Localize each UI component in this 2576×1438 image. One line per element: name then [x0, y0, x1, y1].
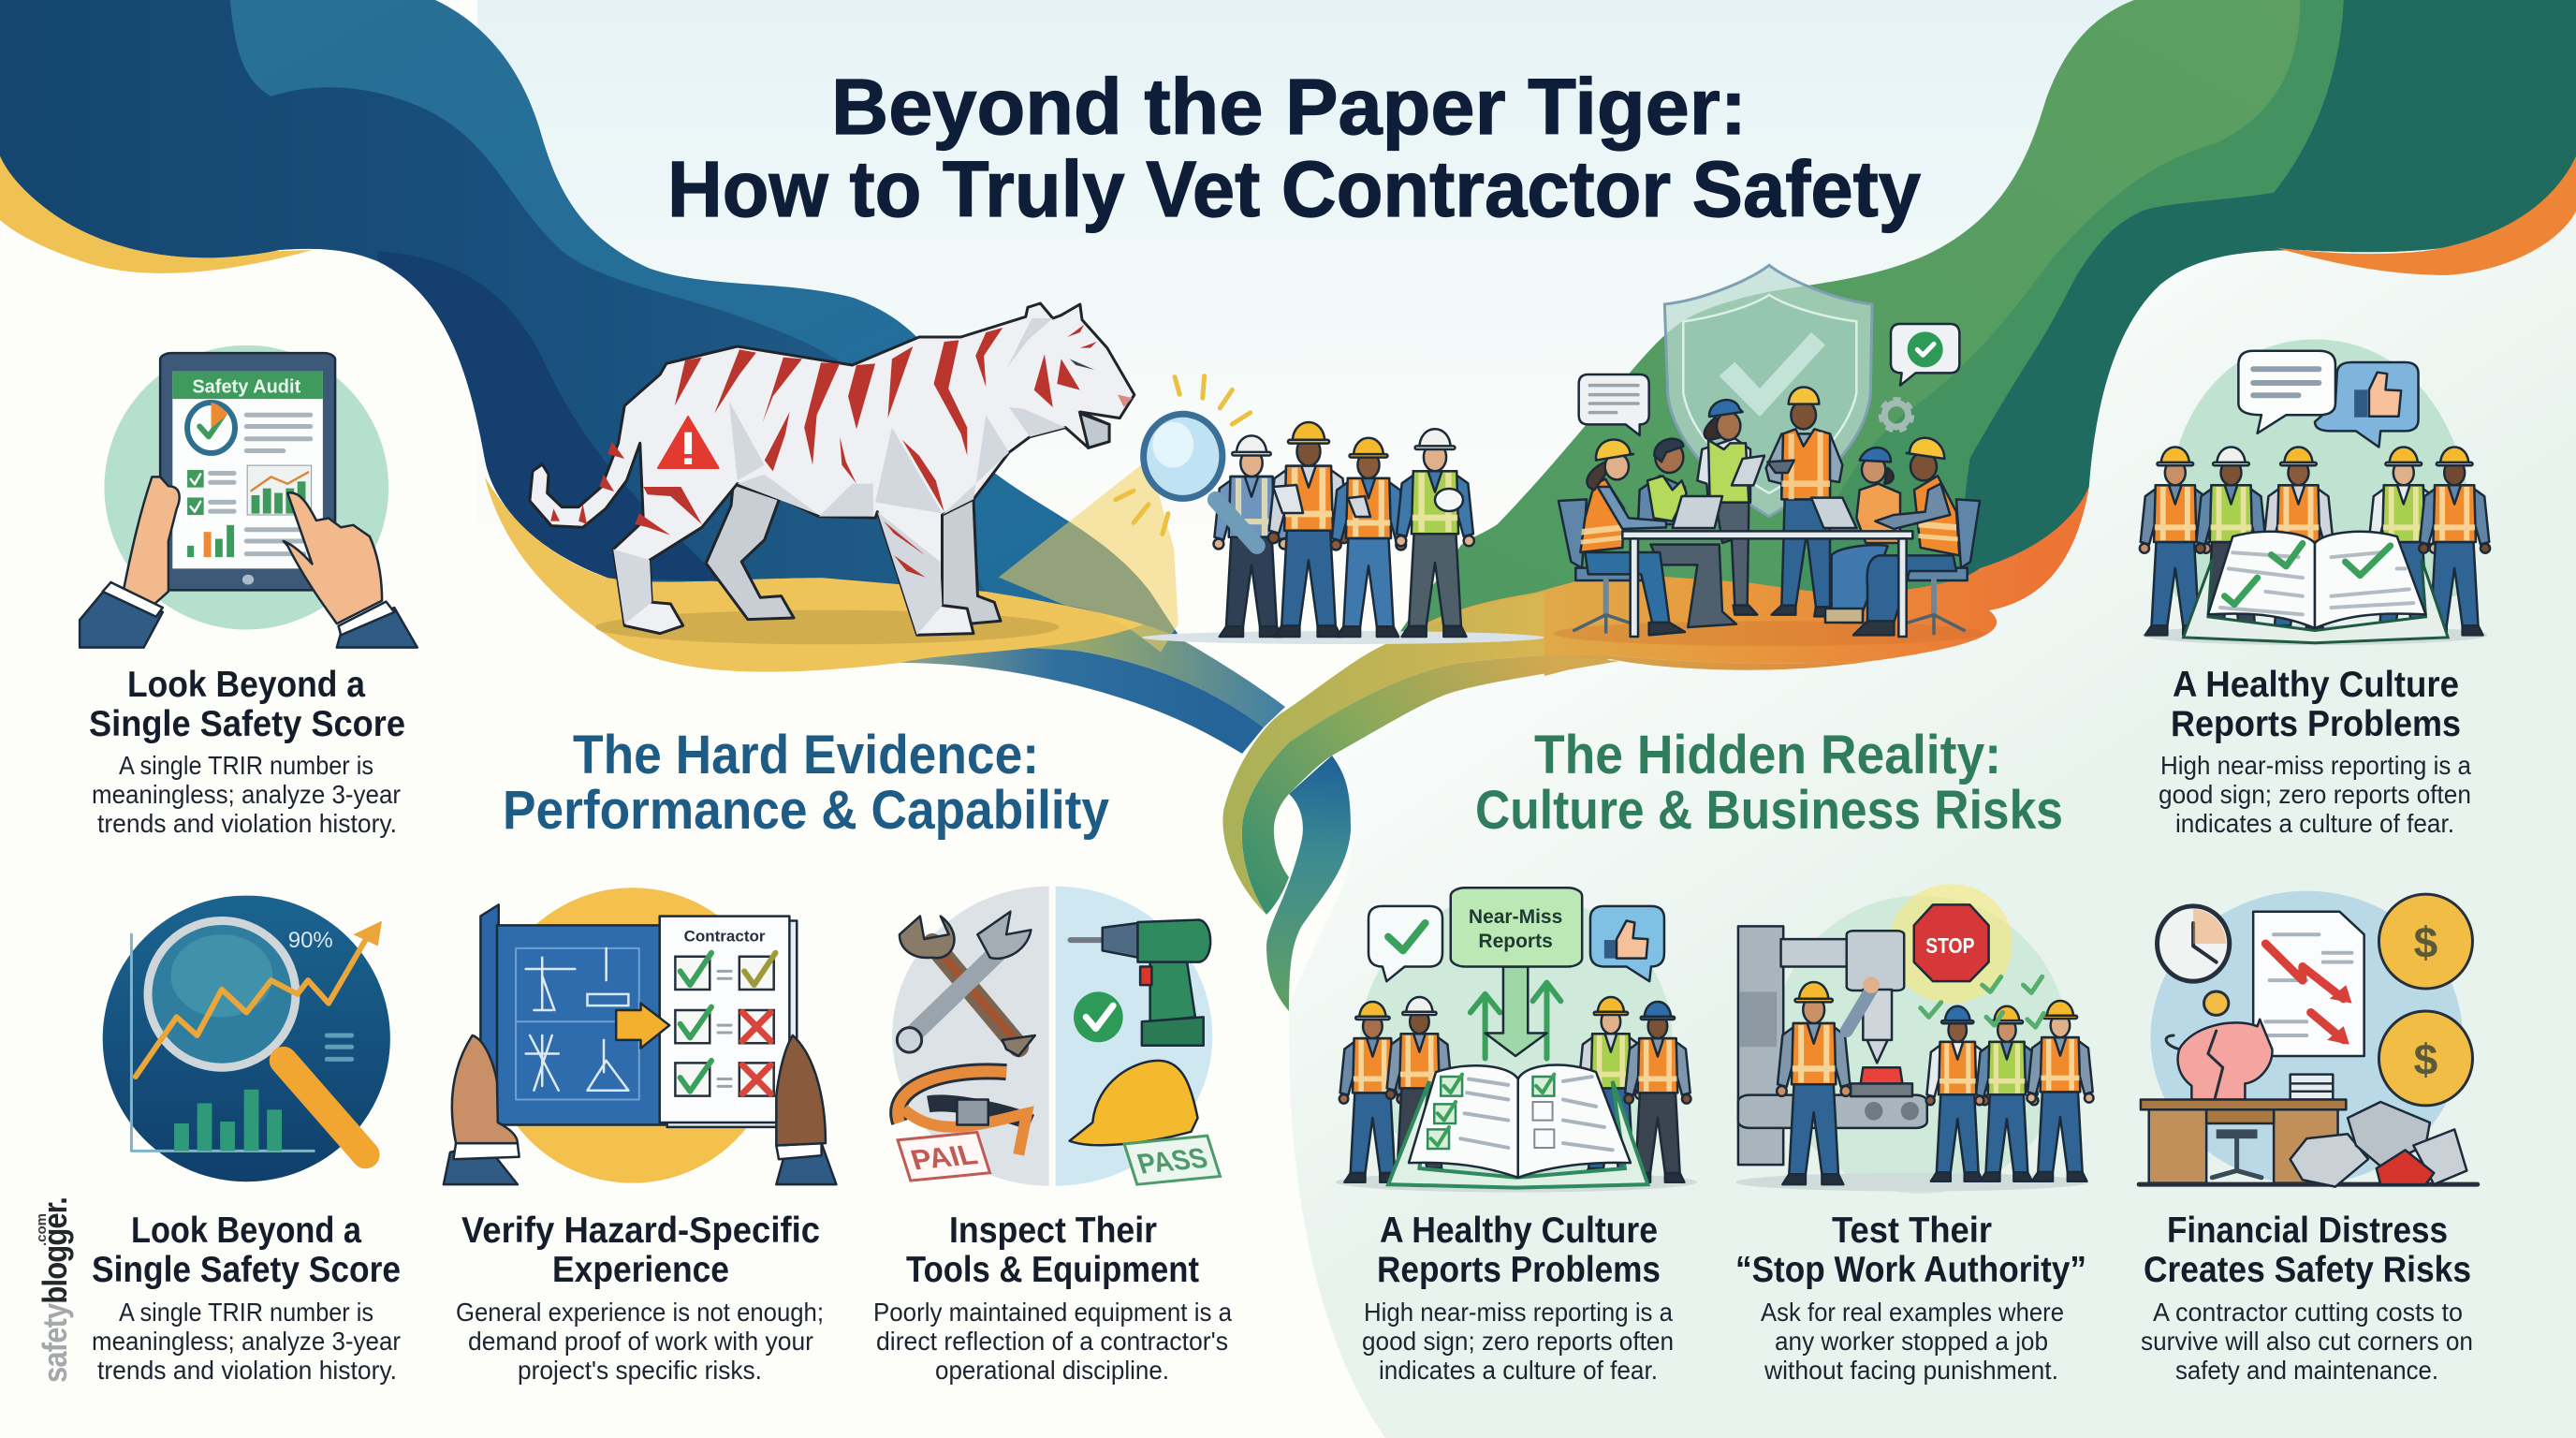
bubble: comment	[2238, 351, 2335, 433]
heading	[89, 665, 405, 744]
title	[667, 63, 1921, 233]
workers: investigators	[1142, 422, 1544, 644]
section heading: hidden reality	[1475, 725, 2063, 841]
icon: workers with book	[2140, 339, 2490, 645]
heading: Experience	[552, 1250, 729, 1290]
icon: tablet audit	[80, 345, 417, 648]
icon: blueprint checklist	[444, 888, 836, 1184]
heading: Creates Safety Risks	[2144, 1250, 2471, 1290]
body text	[456, 1298, 824, 1385]
body text: High near-miss reporting is a	[1364, 1298, 1673, 1327]
icon: tools pass fail	[892, 887, 1220, 1186]
body text: good sign; zero reports often	[2159, 780, 2471, 809]
card: financial distress	[2139, 891, 2478, 1385]
icon: magnifier chart: 90%	[288, 928, 333, 953]
body text: General experience is not enough;	[456, 1298, 824, 1327]
section heading: hard evidence: Performance & Capability	[503, 780, 1109, 841]
belt	[898, 1071, 1031, 1123]
chairs	[1559, 499, 1980, 634]
heading	[461, 1211, 820, 1290]
laptops	[1673, 496, 1856, 528]
heading	[92, 1211, 401, 1290]
body text: Ask for real examples where	[1761, 1298, 2064, 1327]
heading	[906, 1211, 1199, 1290]
card: top-right culture	[2140, 339, 2490, 838]
card: stop work authority	[1735, 884, 2093, 1385]
magnifying glass	[1116, 376, 1257, 546]
body text: Poorly maintained equipment is a	[873, 1298, 1232, 1327]
body text: trends and violation history.	[97, 809, 397, 838]
watermark: .com	[34, 1213, 50, 1246]
heading: Financial Distress	[2167, 1211, 2448, 1251]
title: How to Truly Vet Contractor Safety	[667, 145, 1921, 233]
heading: Test Their	[1832, 1211, 1992, 1251]
title: Beyond the Paper Tiger:	[831, 63, 1747, 151]
ribbon: right strand	[1242, 655, 1619, 915]
ribbon: orange band	[1395, 486, 2089, 664]
drill	[1071, 937, 1105, 943]
body text: survive will also cut corners on	[2141, 1327, 2473, 1356]
heading: Single Safety Score	[92, 1250, 401, 1290]
stamp: fail: PAIL	[907, 1139, 981, 1176]
heading: Tools & Equipment	[906, 1250, 1199, 1290]
tiger body	[530, 303, 1134, 635]
standing man	[1766, 388, 1842, 616]
bubble: near-miss reports	[1451, 888, 1582, 966]
body text	[873, 1298, 1232, 1385]
watermark: safetyblogger.	[36, 1197, 74, 1383]
open book	[2184, 532, 2448, 643]
heading: A Healthy Culture	[1380, 1211, 1658, 1251]
arrows	[1471, 983, 1560, 1058]
heading: Look Beyond a	[127, 665, 365, 705]
heading	[2144, 1211, 2471, 1290]
body text	[1362, 1298, 1674, 1385]
body text: indicates a culture of fear.	[2175, 809, 2454, 838]
heading	[2171, 665, 2461, 744]
body text	[1761, 1298, 2064, 1385]
illustration: paper tiger under inspection	[530, 303, 1178, 653]
seated workers, far	[1638, 439, 1900, 627]
body text: indicates a culture of fear.	[1379, 1356, 1658, 1385]
body text	[92, 1298, 401, 1385]
section heading: hidden reality: Culture & Business Risks	[1475, 780, 2063, 841]
light beam	[999, 459, 1178, 653]
body text: direct reflection of a contractor's	[876, 1327, 1228, 1356]
illustration: safety meeting	[1554, 265, 1984, 646]
icon: piggy bank and coins	[2139, 891, 2478, 1187]
body text	[2159, 751, 2471, 838]
body text: operational discipline.	[935, 1356, 1169, 1385]
body text	[92, 751, 401, 838]
body text: trends and violation history.	[97, 1356, 397, 1385]
stop sign	[1914, 904, 1989, 981]
icon: stop sign machine	[1735, 884, 2093, 1194]
body text: A single TRIR number is	[119, 1298, 373, 1327]
icon: magnifier chart	[103, 896, 390, 1181]
body text: safety and maintenance.	[2175, 1356, 2438, 1385]
section heading: hard evidence	[503, 725, 1109, 841]
gear	[1881, 400, 1912, 431]
body text: any worker stopped a job	[1775, 1327, 2048, 1356]
tiger far legs	[706, 484, 1001, 624]
card: healthy culture reports	[1336, 888, 1697, 1385]
body text: without facing punishment.	[1764, 1356, 2058, 1385]
heading: Look Beyond a	[131, 1211, 361, 1251]
bubble: check	[1368, 906, 1442, 981]
heading	[1377, 1211, 1661, 1290]
card: top-left score	[80, 345, 417, 838]
body text: meaningless; analyze 3-year	[92, 780, 401, 809]
papers	[2291, 1075, 2333, 1100]
stamp: pass: PASS	[1134, 1143, 1211, 1180]
heading: Inspect Their	[949, 1211, 1157, 1251]
green blob	[1395, 0, 2576, 639]
stop sign: STOP	[1925, 933, 1974, 958]
bubble: thumb	[1590, 906, 1664, 981]
debris	[2291, 1102, 2466, 1187]
desk	[2139, 1100, 2478, 1184]
body text: project's specific risks.	[518, 1356, 762, 1385]
stamp: pass	[1124, 1136, 1220, 1184]
bubble: near-miss reports: Near-Miss	[1469, 906, 1562, 928]
icon: blueprint checklist: Contractor	[684, 928, 766, 946]
section heading: hidden reality: The Hidden Reality:	[1534, 725, 2001, 785]
bubble: thumbs up	[2315, 362, 2419, 448]
table	[1622, 531, 1912, 637]
speech bubble: text	[1579, 374, 1649, 435]
card: hazard experience	[444, 888, 836, 1385]
icon: piggy bank and coins: $	[2414, 918, 2437, 967]
body text: A contractor cutting costs to	[2153, 1298, 2463, 1327]
icon: piggy bank and coins: $	[2414, 1035, 2437, 1084]
heading	[1735, 1211, 2086, 1290]
body text: demand proof of work with your	[468, 1327, 813, 1356]
heading: A Healthy Culture	[2173, 665, 2459, 705]
hard hat	[1070, 1061, 1198, 1145]
shield	[1664, 265, 1872, 517]
card: tools and equipment	[873, 887, 1232, 1385]
open book	[1388, 1064, 1647, 1188]
body text: meaningless; analyze 3-year	[92, 1327, 401, 1356]
piggy bank	[2178, 1020, 2273, 1100]
icon: near-miss reports	[1336, 888, 1697, 1192]
heading: Reports Problems	[2171, 704, 2461, 744]
body text: A single TRIR number is	[119, 751, 373, 780]
bubble: near-miss reports: Reports	[1478, 931, 1553, 952]
seated workers, near	[1580, 438, 1959, 635]
heading: Single Safety Score	[89, 704, 405, 744]
warning sign	[658, 417, 719, 468]
speech bubble: check	[1891, 324, 1959, 386]
body text	[2141, 1298, 2473, 1385]
body text: High near-miss reporting is a	[2160, 751, 2471, 780]
standing woman	[1697, 400, 1764, 615]
card: look beyond score	[92, 896, 401, 1385]
heading: Reports Problems	[1377, 1250, 1661, 1290]
swooshes	[0, 0, 2576, 672]
heading: “Stop Work Authority”	[1735, 1250, 2086, 1290]
stamp: fail	[898, 1132, 990, 1181]
ribbon: left strand	[899, 646, 1264, 754]
body text: good sign; zero reports often	[1362, 1327, 1674, 1356]
icon: tablet audit: Safety Audit	[192, 376, 301, 397]
heading: Verify Hazard-Specific	[461, 1211, 820, 1251]
section heading: hard evidence: The Hard Evidence:	[573, 725, 1039, 785]
